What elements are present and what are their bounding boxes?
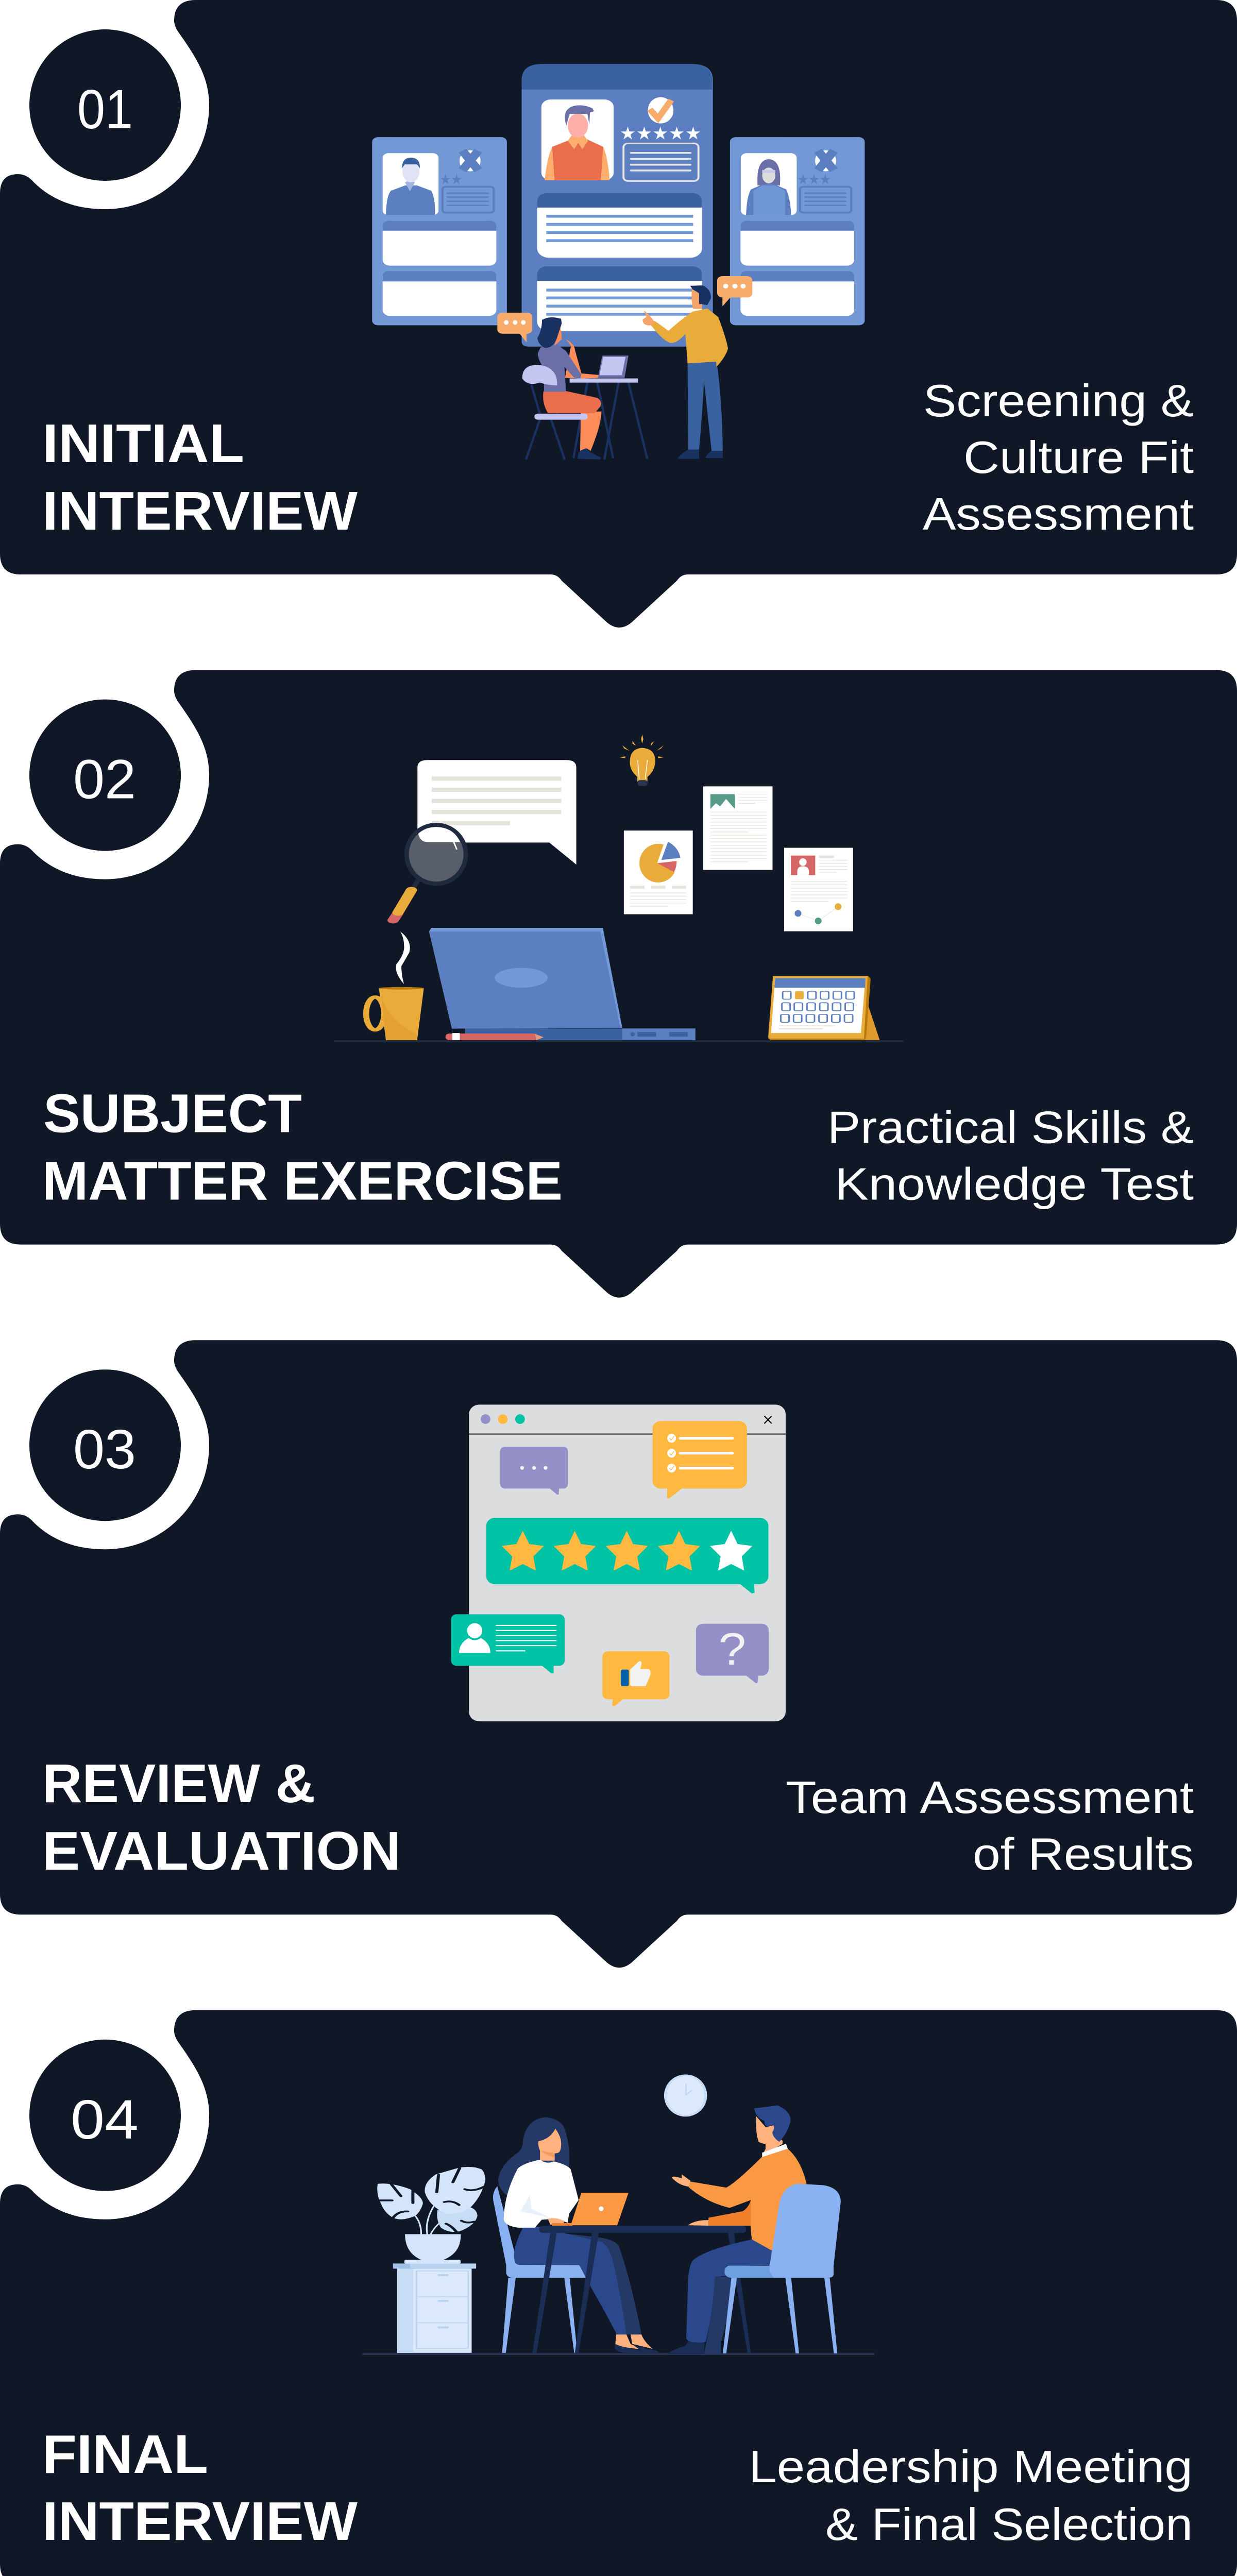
number badge — [29, 1369, 181, 1521]
panel shape — [0, 2010, 1237, 2576]
seated woman at desk — [522, 317, 647, 460]
star rating bubble — [486, 1518, 768, 1594]
panel: step 02 subject matter exercise — [0, 670, 1237, 1298]
description — [923, 375, 1194, 539]
description — [786, 1772, 1194, 1879]
number badge: 03 — [73, 1418, 136, 1480]
heading: FINAL — [42, 2424, 208, 2485]
standing man pointing — [642, 285, 728, 459]
heading — [42, 1083, 563, 1212]
coffee mug — [366, 987, 424, 1040]
document with photo — [703, 786, 772, 870]
description: Assessment — [923, 488, 1194, 539]
heading: INTERVIEW — [42, 2491, 358, 2552]
light bulb — [620, 735, 664, 786]
description: Practical Skills & — [827, 1102, 1194, 1153]
profile bubble — [451, 1614, 565, 1673]
document with profile and graph — [784, 848, 853, 931]
description — [827, 1102, 1194, 1210]
calendar — [768, 976, 879, 1040]
laptop — [429, 928, 696, 1040]
illustration: candidate profile cards with interviewers — [372, 64, 865, 460]
right candidate card — [730, 137, 865, 325]
heading: MATTER EXERCISE — [42, 1151, 563, 1212]
heading — [42, 413, 358, 541]
description: Knowledge Test — [835, 1159, 1194, 1210]
potted plant — [377, 2167, 485, 2264]
speech bubble with text lines — [417, 760, 577, 865]
document pie chart — [624, 831, 693, 914]
illustration: desk with laptop and documents — [334, 735, 903, 1042]
description: Screening & — [923, 375, 1194, 426]
description: Leadership Meeting — [749, 2441, 1193, 2492]
number badge — [29, 29, 181, 181]
checklist bubble — [652, 1421, 747, 1499]
heading: SUBJECT — [43, 1083, 302, 1144]
description: Culture Fit — [963, 432, 1194, 483]
woman in chair — [493, 2117, 659, 2353]
description: of Results — [973, 1828, 1194, 1879]
heading — [42, 1753, 401, 1882]
steam — [396, 931, 410, 984]
pencil — [446, 1033, 544, 1040]
number badge — [29, 2040, 181, 2191]
panel shape — [0, 1340, 1237, 1968]
heading — [42, 2424, 358, 2552]
panel shape — [0, 0, 1237, 628]
heading: REVIEW & — [42, 1753, 315, 1814]
panel: step 03 review and evaluation — [0, 1340, 1237, 1968]
center candidate card — [522, 64, 713, 347]
man in chair — [668, 2106, 841, 2354]
wall clock — [664, 2074, 707, 2116]
question bubble: ? — [719, 1624, 746, 1674]
question bubble — [696, 1624, 769, 1683]
file cabinet — [393, 2263, 476, 2353]
illustration: meeting at table — [362, 2074, 874, 2355]
left candidate card — [372, 137, 507, 325]
table — [533, 2226, 751, 2353]
description — [749, 2441, 1193, 2550]
heading: EVALUATION — [42, 1821, 401, 1882]
illustration: rating window — [451, 1404, 786, 1721]
number badge — [29, 700, 181, 851]
number badge: 01 — [77, 78, 133, 140]
browser window — [469, 1404, 786, 1721]
heading: INTERVIEW — [42, 481, 358, 541]
description: Team Assessment — [786, 1772, 1194, 1823]
floor — [362, 2353, 874, 2355]
panel: step 04 final interview — [0, 2010, 1237, 2576]
ellipsis bubble — [500, 1447, 568, 1495]
number badge: 04 — [71, 2088, 139, 2150]
thumbs up bubble — [602, 1651, 670, 1706]
number badge: 02 — [73, 748, 136, 810]
magnifying glass — [393, 823, 468, 920]
panel: step 01 initial interview — [0, 0, 1237, 628]
panel shape — [0, 670, 1237, 1298]
speech bubble left — [497, 313, 532, 343]
shelf — [334, 1040, 903, 1042]
description: & Final Selection — [825, 2499, 1193, 2550]
heading: INITIAL — [42, 413, 244, 474]
speech bubble right — [717, 276, 752, 307]
